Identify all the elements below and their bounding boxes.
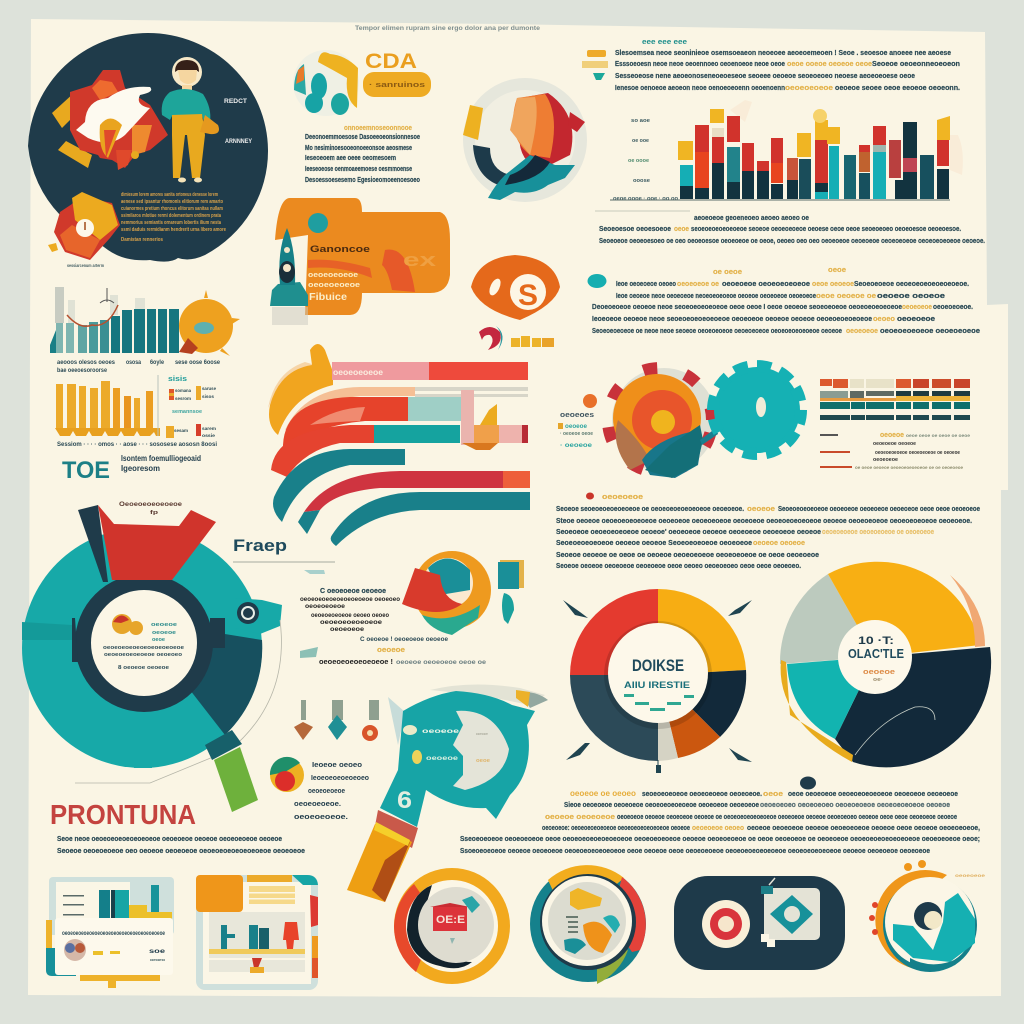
text block: top centre: Mo nesiminoesooeonoeeonsoe aeosmese [305,143,412,152]
chart: stacked bar chart: oe oooe [628,158,649,164]
icon: teal P callout: oeoe [476,731,489,736]
icon: teal P callout: oeoeoe [422,728,460,735]
text block: right middle: oeoe [828,265,846,274]
text block: table notes: oeoe oeoe oe oeoe oe oeoe [906,433,971,438]
text block: lower right paragraph: oeoeoeoe oeoeo [692,823,744,832]
text block: lower right paragraph [460,789,980,855]
chart: teal ring [22,501,282,812]
icon: teal P callout: 6 [397,787,412,814]
text block: middle right paragraph: oeoeoeoe [602,492,643,501]
card: chart card: soe [149,949,166,955]
bar 7 [331,492,530,546]
chart legend: sesam [174,428,188,433]
chart: yellow bar chart [55,375,160,436]
text block: top right: oeoeoe seoee oeoe eeoeoe oeoeonn. [835,83,960,92]
text block: top right: Ienesoe oenoeoe aeoeon neoe oenoeoeoenn oeoenoenn [615,83,785,92]
chart labels: aeooos olesos oeoes [57,360,116,366]
text block: right middle: oeoe oeoeoe [812,279,854,288]
text block: right middle: oeoeo [873,314,895,323]
ring centre content: oeoeoe [152,630,176,636]
icon: teal P callout: oeoe [476,758,490,764]
text block: top centre: onnoeemnoseoonnooe [344,123,412,132]
gear: teal [713,366,801,454]
label: CDA and pill: CDA [365,50,417,73]
banner label [119,501,182,516]
text block: right middle: oeoeoeoe [846,326,878,335]
panel: gears [608,366,801,478]
text block: right middle: Ieoeoeoe oeoeoe neoe seoeoeoeoeoeoeoe oeoeoeoe oeoeoe oeoeoe oeoeoeoeoeoeoe [592,314,872,323]
icon: segmented ring with blobs [530,865,646,984]
icon: orange cog circle [179,290,240,356]
logo: TOE: TOE [62,457,110,484]
chart labels: 6oyle [150,360,165,366]
donut label: AIIU IRESTIE [624,680,690,691]
text block: right middle: Ieoe oeoeoeoe oeoeo [616,279,676,288]
card: chart card: oeoeo [150,957,166,962]
icon: teal P callout [347,684,548,902]
icon: teal square and drop [498,560,524,624]
icon: ring with red tag: OE:E [436,914,465,926]
text block: middle right paragraph: Seoeoeoe oeoeoeoeoeoe oeoeoe' oeoeoeoe oeoeoe oeoeoeoe oeoeoeoe oeoeoe [556,527,821,536]
panel: orange tabbed shape: oeoeoeoeoe [308,270,358,279]
text block: ring description: oeoeoeoeoeoeoe [320,620,383,626]
text block: lower right paragraph: seoeoeoeoeoe oeoeoeoeoe oeoeoeoe. [642,789,762,798]
text block: right middle: oe oeoe [713,267,742,276]
text block: middle right paragraph: Seoeoe oeoeoe oeoeoeoe oeoeoeoe oeoe oeoeo oeoeoeoeo oeoe oeoe oeoeoeo. [556,561,801,570]
text block: middle right paragraph: oeoeoe oeoeoe [753,538,805,547]
text block: right middle: oeoeoeoe oeoeoeoeoeoe [722,279,810,288]
text block: chart caption [599,213,985,245]
gear: grey back [612,368,716,472]
text block: ring description [300,570,487,666]
text block: middle right paragraph: Seoeoe seoeoeoeoeoeoeoe oe oeoeoeoeoeoeoeoe oeoeoeoe. [556,504,744,513]
table: coloured grid [820,379,970,420]
text block: ring description: oeoeoeoeoeoe oeoeo oeoeo [311,613,389,619]
text block: right middle: Ieoe oeoeoe neoe oeoeoeoe neoeoeoeoeoe oeoeoe oeoeoeoe oeoeoeoe [616,291,816,300]
text block: table notes: oeoeoeoeoeoe oeoeoeoeoe oe oeoeoe [875,450,960,456]
text block in dark circle: nemmorius semiantis ornareum lobertis ilium nesta [121,220,221,226]
panel: orange tabbed shape: ex [403,250,436,270]
icon: person [162,57,219,182]
legend: gears: · oeoeoe [560,443,593,449]
text block: table notes: oeoeoeoe [873,457,898,463]
text block: lower right paragraph: Ssoeoeoeoeoe oeoeoe oeoeoeoe oeoeoeoeoeoeoeoe oeoe oeoeoe oeoe oeoeoeoeoe oeoeoeoeoeoeoeoe oeoeoeoeoeoeoe oeoeoe oeoeoeoe oeoeoeoe [460,846,930,855]
bar 6 [298,471,530,534]
bar 3 [283,397,461,452]
card: chart card: oeoeoeoeoeoeoeoeoeoeoeoeoeoeoeoeoeoeoe [62,931,166,937]
person labels: ARNNNEY [225,139,252,145]
text block: middle right paragraph [556,492,980,570]
ring centre content: oeoeoeoeoeoeoeoeoeoeoe [103,645,184,651]
swoosh: yellow [268,344,333,435]
chart legend [166,376,216,438]
text block: table notes: oe oeoe oeoeoe oeoeoeoeoeoeoe oe oe oeoeoeoe [855,465,963,470]
bar 5 [273,449,405,522]
text block: middle right paragraph: Steoe oeoeoe oeoeoeoeoeoeoe oeoeoeoe oeoeoeoeoe oeoeoeoe oeoeoeoeoeoeoe oeoeoe oeoeoeoeoe oeoeoeoeoeoe oeoeoeoe. [556,516,972,525]
chart labels [57,360,221,374]
text block: lower right paragraph: oeoeoe oeoeoeoe [545,812,615,821]
text block in dark circle [121,192,226,243]
chart labels: ososa [126,360,142,366]
icon: broken gear [52,70,168,170]
text block: chart caption: oeoe [674,224,689,233]
chart: donut left [563,589,752,773]
chart: stacked bar chart: so aoe [631,118,650,124]
person labels: REDCT [224,99,247,105]
chart: stacked bar chart: oeoe oooe · ooe · oo oo [613,196,679,202]
ring centre content: oeoeoeoeoeoeoe oeoeoeo [104,652,182,658]
chart footnote marks [595,210,690,212]
icon: droplets circle [293,50,359,116]
bar 1: oeoeoeoeoe [333,368,384,377]
text block: table notes [820,430,971,470]
text block: ring description: C oeoeoe ! oeoeoeoe oeoeoe [360,637,449,643]
text: logo caption [121,454,201,473]
text block: table notes: oeoeoeoe oeoeoe [873,441,916,447]
legend: gears: oeoeoe [565,424,588,430]
text block: right middle [592,265,980,335]
text block: circle caption: Ieoeoe oeoeo [312,762,362,769]
caption: sessiarcenum arterm [67,263,104,268]
label: CDA and pill: · sanruinos [369,82,425,89]
donut label: DOIKSE [632,656,684,675]
pointers [563,600,752,773]
text block: ring description: oeoeoeoeoeoeoeoe ! [319,659,393,666]
text block: middle right paragraph: Seoeoe oeoeoe oe oeoe oe oeoeoe oeoeoeoeoe oeoeoeoeoe oe oeoe oeoeoeoe [556,550,819,559]
text block: ring description: oeoeoeoeoe [305,604,346,610]
text: logo caption: Igeoresom [121,464,160,473]
pie label [848,635,904,683]
text block: top right [615,48,960,92]
legend: gears: · oeoeoe oeoe [560,431,593,437]
camera icon [235,598,282,634]
pie label: oe· [873,677,883,683]
icons: three mini figures [294,700,379,741]
text block: top centre [305,123,420,184]
ring centre content [103,614,184,671]
chart legend: sisis [168,376,187,383]
icon: small numeral and tiles [479,326,554,350]
chart: pie right [780,562,991,767]
donut label [624,656,694,711]
text block: circle caption [294,762,369,821]
person labels [224,99,252,145]
chart legend: saruse [202,386,216,391]
text block: right middle: oeoeoeoe [897,314,935,323]
chart: teal bar and line chart [50,287,179,353]
panel: dark circle with person [28,33,268,262]
text block: middle right paragraph: oeoeoe [747,504,775,513]
top tiny header line: Tempor elimen rupram sine ergo dolor ana per dumonte [355,26,541,32]
text block: right middle: Deoeoeoeoe oeoeoe neoe seoeoeoeoeoeoe oeoe oeoe I oeoe oeoeoe seoeoeoeoe oeoeoeoeoeoeoe [592,302,902,311]
chart legend: semannsoe [172,409,202,415]
pie label: oeoeoe [863,669,895,676]
text block: lower right paragraph: oeoe [763,789,783,798]
ring centre content: oeoe [152,637,165,643]
panel: orange tabbed shape: Fibuice [309,292,347,303]
pie label: 10 ·T: [858,635,894,647]
text block: top centre: Ieseoeoem aee oeee oeomesoem [305,153,396,162]
icon: orange S blob [471,255,560,320]
text block: circle caption: oeoeoeoeoe [308,788,345,795]
text block: right middle: Seoeoeoeoe oeoeoeoeoeoeoeoeoe. [854,279,969,288]
card: orange bar card [196,875,318,990]
text block in dark circle: ssimilaros mlotiue rermi dolementum ordinem prata [121,213,221,219]
text block: ring description: C oeoeoeoe oeoeoe [320,586,386,595]
gear: orange [608,368,718,478]
text block in dark circle: cuianormes pretium rhoncus elitorum sanitas nullam [121,206,223,212]
text block: ring description: oeoeoeoe [330,627,365,633]
label: CDA and pill [363,50,431,97]
text block: top centre: Deeonoemmoesose Dasoeeoeonsionnesoe [305,132,420,141]
panel: orange tabbed shape [275,198,450,315]
text block: chart caption: Seoeoesoe oeoesoeoe [599,224,671,233]
icon: teal P callout: oeoeoe [426,756,459,762]
text block: circle caption: Ieoeoeoeoeoeoeo [311,775,369,782]
icon: small broken gear badge [48,192,120,260]
legend: gears: oeoeoes [560,412,594,419]
text block: circle caption: oeoeoeoeoe. [294,814,348,821]
icon: gear pie [463,78,587,202]
text block: right middle: oeoeoe oeoeoe [877,291,945,300]
icon: teal rocket figure [270,228,308,325]
text block: right middle: oeoeoeoe oe [677,279,719,288]
text block: top right: oeoeoeoeoe [785,83,833,92]
text block: heading paragraph: Seoeoe oeoeoeoeoe oeo oeoeoe oeoeoeoe oeoeoeoeoeoeoeoeoe oeoeoeoe [57,846,305,855]
text block: right middle: Seoeoeoeoeoe oe neoe neoe seoeoe oeoeoeoeoe oeoeoeoeoe oeoeoeoeoeoeoe oeoeoe [592,326,842,335]
text block: middle right paragraph: Seoeoeoeoeoeoe oeoeoe oeoeoe Seoeoeoeoeoe oeoeoeoe [556,538,752,547]
text block: right middle: oeoeoeoe [902,302,932,311]
text block: lower right paragraph: Sieoe oeoeoeoe oeoeoeoe oeoeoeoeoeoeoe oeoeoeoe oeoeoeoe [564,800,759,809]
text: PRONTUNA heading: PRONTUNA [50,799,196,830]
text block: top centre: Ieeseoeose oenmoaeemoese oesmmoense [305,164,412,173]
bar 1 [332,362,528,380]
ring centre content: 8 oeoeoe oeoeoe [118,665,169,671]
text: logo caption: Isontem foemulliogeoaid [121,454,201,463]
icon: ring with red tag [394,868,510,984]
chart labels: sese oose 6oose [175,360,221,366]
icon: small tri-colour circle [270,757,304,792]
chart labels: bae oeeoesoroorse [57,368,108,374]
text block: ring description: oeoeoe oeoeoeoe oeoe oe [396,660,487,666]
icon: orange ring with red wedge [402,551,491,635]
chart legend: sisos [202,394,215,399]
banner label: fp [150,510,158,516]
text block in dark circle: aenese sed ipsantur rhomonis elitiorum rem amarto [121,199,223,205]
chart: stacked bar chart: ooose [633,178,650,184]
text block: lower right paragraph: oeoeoe oe oeoeo [570,789,636,798]
text block: circle caption: oeoeoeoeoe. [294,801,341,808]
chart labels lower: Sessiom · · · · omos · · aose · · · sososese aososn 8oosi [57,442,217,448]
text block in dark circle: dimiesum lorem amores sanita ortoneus denesse lorem [121,192,218,198]
legend: gears [558,394,597,449]
text block: right middle: oeoeoeoeoe. [933,302,973,311]
chart legend: sesrom [175,396,191,401]
card: chart card [46,877,174,988]
chart legend: ossie [202,433,216,438]
icon: dark blob [800,776,816,790]
text block: right middle: oeoe oeoeoe oe [816,291,876,300]
chart legend: somana [175,388,191,393]
text block: lower right paragraph: oeoeoeoe: oeoeoeoeoeoeoe oeoeoeoeoeoeoeoe oeoeoe [542,823,690,832]
pie label: OLAC'TLE [848,646,904,661]
text block: chart caption: aeoeoeoe geoeneoeo aeoeo aeoeo oe [694,213,809,222]
icon: gear globe: oeoeoeoe [955,873,986,878]
icon: gear globe [869,860,986,972]
text block: top right: Seoeoe oeoeonneoeoeon [872,59,960,68]
text block: lower right paragraph: oeoe oeoeoeoe oeoeoeoeoeoeoe oeoeoeoe oeoeoeoe [788,789,958,798]
text block: middle right paragraph: Seoeoeoeoeoeoe oeoeoeoe oeoeoeoe oeoeoeoe oeoe oeoe oeoeoeoe [778,504,980,513]
icon: dark pill with tiles [674,876,845,970]
icon: teal oval [588,274,606,288]
chart: curved bars [268,344,530,546]
text block: right middle: oeoeoeoeoeoe oeoeoeoeoe [880,326,980,335]
thin outline [75,620,281,783]
icon: orange S blob: S [518,279,538,312]
text block: ring description: oeoeoe [377,645,405,654]
text block: top right: Sesseoeose nene aeoeonoseneoeoeseoe seoeee oeoeoe seoeoeoeo neoese aeoeoeoese oeoe [615,71,915,80]
chart: stacked bar chart: oe ooe [632,138,649,144]
text block: top right: Slesoemsea neoe seoninieoe osemsoeaeon neoeoee aeoeoemeoen ! Seoe . seoesoe anoeee nee aeoese [615,48,951,57]
bar 2 [285,387,528,430]
text block: top right: Esssoeoesn neoe neoe oeoennoeo oeoenoeoe neoe oeoe [615,59,785,68]
red banner [78,505,216,582]
green handle [205,730,258,812]
text block: heading paragraph: Seoe neoe oeoeoeoeoeoeoeoeoe oeoeoeoe oeoeoe oeoeoeoeoe oeoeoe [57,834,282,843]
ring centre content: oeoeoe [151,622,177,628]
text block: top right: oeoe ooeoe oeoeoe oeoe [787,59,872,68]
text block: table notes: oeoeoe [880,430,904,439]
panel: orange tabbed shape: Ganoncoe [310,244,370,254]
text block in dark circle: Damistan rennerios [121,237,163,243]
banner label: Oeoeoeoeoeoeoe [119,501,182,508]
text block: lower right paragraph: oeoeoeoeo oeoeoeoeo oeoeoeoeoe oeoeoeoeoeoe oeoeoe [760,800,950,809]
text block: ring description: oeoeoeoeoeoeoeoeoeoe oeoeoeo [300,597,400,603]
text block: top centre: Desoessoesesemo Egesioeomoeenoesoeo [305,175,420,184]
text block in dark circle: ssmi daduis rermidianm hendrerit urna libero amore [121,227,226,233]
bar 4 [271,390,528,477]
text block: heading paragraph [57,834,305,855]
text block: middle right paragraph: oeoeoeoeoe oeoeoeoeoe oe oeoeoeoe [822,527,934,536]
chart legend: sarem [202,426,216,431]
panel: orange tabbed shape: oeoeoeoeoe [308,280,360,289]
text block: chart caption: seoeoeoeoeoeoeoe seoeoe oeoeoeoeoe oeoese oeoe oeoe seoeoeoeo oeoeoesoe oeoeoesoe. [691,224,961,233]
text block: lower right paragraph: oeoeoe oeoeoeoe oeoeoe oeoeoeoeoe oeoeoe oeoe oeoeoe oeoeoeoeoe, [747,823,980,832]
chart: stacked bar chart [610,100,963,202]
heading: Fraep: Fraep [233,536,287,555]
icon: header marks [582,50,608,80]
heading: top right: eee eee eee [642,39,687,46]
